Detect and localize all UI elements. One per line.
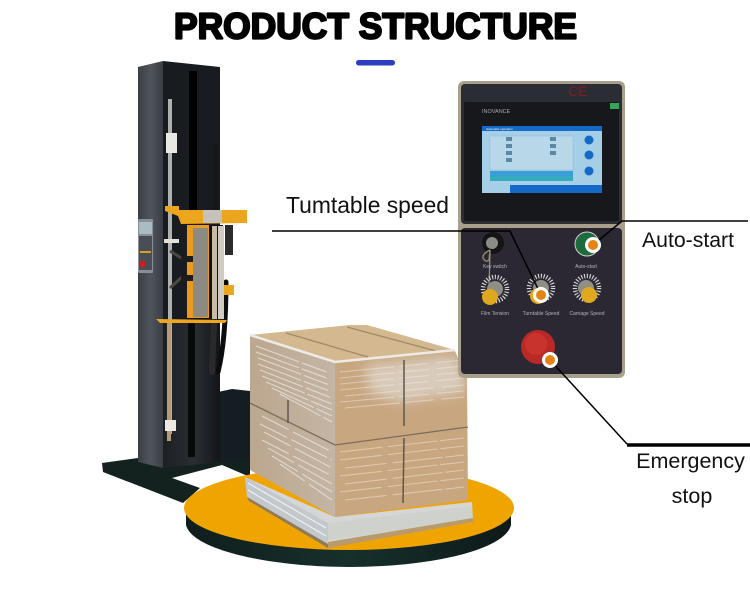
leader line: auto-start <box>593 221 748 245</box>
key switch: Key switch <box>483 264 507 270</box>
label: turntable speed: Tumtable speed <box>286 192 449 218</box>
top wrap highlight <box>250 335 455 362</box>
auto-start button <box>575 232 599 270</box>
title: PRODUCT STRUCTURE <box>174 6 577 46</box>
label: auto-start: Auto-start <box>642 229 734 252</box>
machine tower <box>102 61 250 503</box>
key switch <box>482 232 507 290</box>
film sheen right <box>340 355 465 500</box>
tower mini control box <box>138 219 153 273</box>
cable chain <box>212 147 226 372</box>
emergency stop button <box>521 330 555 364</box>
pallet wrapped bottom <box>245 477 473 546</box>
turntable yellow top <box>184 466 514 550</box>
box top <box>250 325 455 362</box>
tower front face <box>163 61 220 468</box>
touch screen: Automatic operation <box>486 127 513 131</box>
tower side face <box>138 61 163 468</box>
panel upper section <box>461 84 622 224</box>
box right face <box>335 351 468 517</box>
guide rail and limit switches <box>165 99 177 441</box>
film carriage <box>156 206 247 323</box>
turntable speed knob <box>523 276 560 317</box>
carriage speed knob <box>569 276 605 317</box>
touch screen <box>482 126 602 193</box>
film tension knob: Film Tension <box>481 311 509 317</box>
machine base frame <box>102 455 250 503</box>
label: emergency stop: Emergency <box>636 449 745 473</box>
box left face <box>250 335 335 517</box>
box seams <box>250 403 468 445</box>
rear motor box <box>218 389 250 462</box>
tower slot <box>189 71 197 211</box>
brand text: INOVANCE <box>482 109 511 115</box>
turntable <box>184 466 514 567</box>
label: emergency stop: stop <box>672 484 712 508</box>
infographic canvas <box>102 12 750 567</box>
wrapped pallet box <box>245 325 473 548</box>
screen bezel <box>464 102 619 221</box>
carriage speed knob: Carriage Speed <box>569 311 605 317</box>
film tension knob <box>481 277 509 317</box>
film streaks left <box>256 346 332 500</box>
marker: emergency stop <box>542 352 558 368</box>
panel lower section <box>461 228 622 374</box>
leader line: emergency stop rule <box>627 443 750 447</box>
auto-start button: Auto-start <box>575 264 597 270</box>
CE mark: CE <box>568 83 588 99</box>
leader line: turntable speed <box>272 231 541 295</box>
marker: turntable speed <box>533 287 549 303</box>
title accent bar <box>356 60 395 66</box>
turntable speed knob: Turntable Speed <box>523 311 560 317</box>
status light <box>610 103 619 109</box>
leader line: emergency stop <box>550 360 627 444</box>
turntable base ring <box>186 512 511 567</box>
marker: auto-start <box>585 237 601 253</box>
panel frame <box>458 81 625 378</box>
control panel <box>458 81 625 378</box>
